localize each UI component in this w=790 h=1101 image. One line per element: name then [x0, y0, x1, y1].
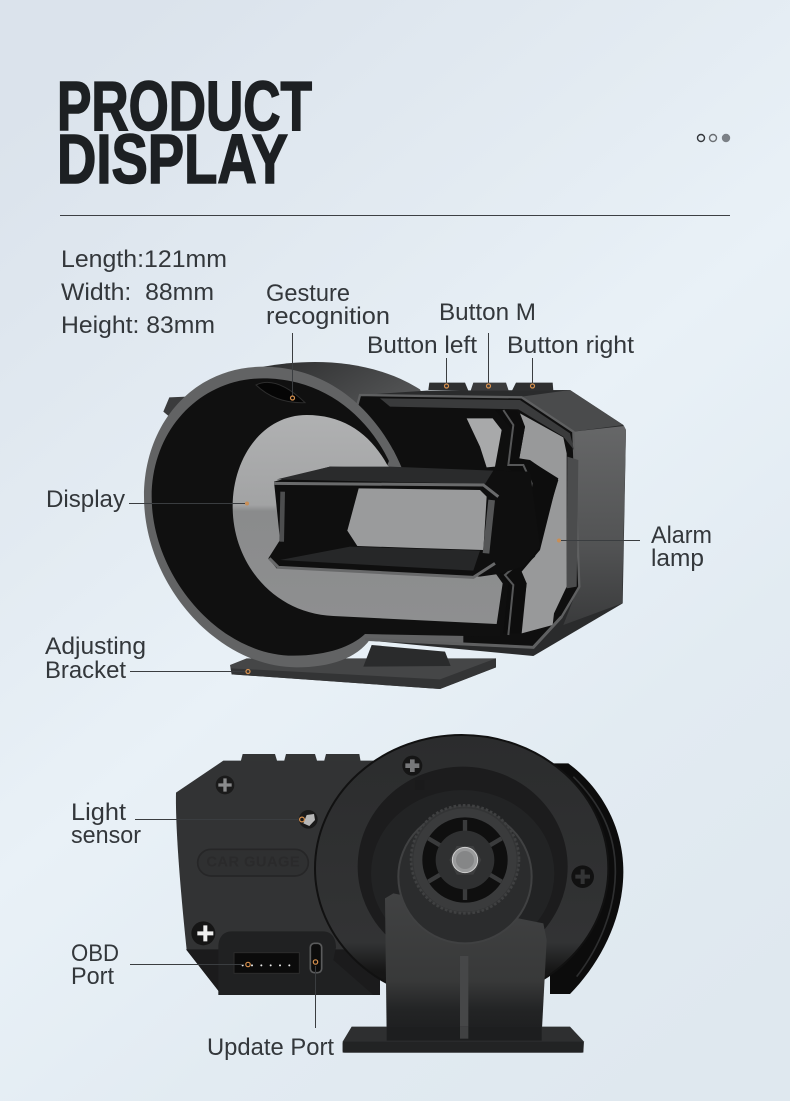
connector — [234, 953, 299, 973]
housing lower band — [186, 949, 380, 995]
callout: button left — [367, 332, 477, 388]
window top edge — [274, 483, 498, 497]
callout: light sensor — [71, 799, 304, 849]
redraw right frame edge — [365, 617, 562, 647]
window right edge — [486, 500, 492, 553]
dimensions text: Height: 83mm — [61, 312, 215, 339]
callout: button M: Button M — [439, 299, 536, 326]
window bottom edge — [269, 558, 495, 577]
recess ring — [371, 790, 554, 957]
callout: light sensor: Light — [71, 799, 126, 826]
callout: display — [46, 486, 249, 513]
dimensions text: Length:121mm — [61, 246, 227, 273]
micro usb — [310, 943, 322, 973]
device body — [343, 390, 626, 656]
base plate — [343, 1027, 584, 1053]
rib foot — [460, 1027, 468, 1039]
callout: OBD port — [71, 940, 250, 990]
knob vent — [422, 817, 508, 903]
buttons — [428, 383, 468, 391]
rear rim highlight — [573, 777, 615, 977]
mount plate edge — [231, 658, 496, 689]
callout: OBD port: Port — [71, 963, 114, 990]
callout: button left: Button left — [367, 332, 477, 359]
housing — [176, 761, 380, 995]
rear back rim — [550, 763, 623, 994]
knob outer — [413, 808, 517, 912]
rear cylinder — [263, 362, 463, 483]
callout: gesture recognition — [266, 280, 390, 400]
screw: top left — [216, 776, 234, 794]
knurled collar — [411, 805, 519, 913]
light sensor — [299, 810, 318, 829]
mount neck — [363, 645, 451, 667]
callout: button right: Button right — [507, 332, 634, 359]
upper grey window — [467, 418, 502, 467]
title: PRODUCT — [57, 67, 312, 145]
recess — [358, 767, 568, 967]
side stub — [163, 397, 187, 420]
top inner lip — [380, 398, 574, 450]
hex nut — [449, 846, 481, 875]
right inner lip — [567, 457, 578, 588]
title — [57, 67, 312, 198]
display grey surface — [233, 415, 503, 624]
ring edge over window top — [387, 450, 404, 473]
page indicator dots — [698, 134, 730, 142]
callout: adjusting bracket — [45, 633, 250, 684]
mount plate — [230, 658, 496, 689]
bracket foot — [387, 1027, 542, 1041]
dark S dividers — [495, 410, 558, 633]
front frame — [337, 395, 579, 647]
hub — [436, 831, 494, 889]
main disc — [315, 735, 608, 1002]
nut center — [452, 847, 478, 873]
callout: display: Display — [46, 486, 126, 513]
ring rim — [144, 367, 463, 667]
product: front view — [144, 362, 626, 689]
product: rear view — [176, 735, 623, 1053]
screw: lower left — [191, 921, 215, 945]
bracket rib — [460, 956, 468, 1039]
top buttons — [241, 754, 361, 762]
callout: adjusting bracket: Adjusting — [45, 633, 146, 660]
callout: light sensor: sensor — [71, 822, 141, 849]
divider highlight — [503, 410, 532, 635]
window top surface — [277, 467, 493, 484]
callout: update port: Update Port — [207, 1034, 334, 1061]
callout: update port — [207, 960, 334, 1061]
callout: OBD port: OBD — [71, 940, 119, 967]
vent spokes — [428, 820, 502, 900]
callout: adjusting bracket: Bracket — [45, 657, 126, 684]
callout: button M — [439, 299, 536, 388]
base plate front edge — [343, 1042, 583, 1053]
right grey display panel — [517, 413, 567, 633]
callout: gesture recognition: Gesture — [266, 280, 350, 307]
callout: button right — [507, 332, 634, 388]
screw: right disc — [571, 865, 594, 888]
callout: gesture recognition: recognition — [266, 303, 390, 330]
top marking — [415, 780, 424, 790]
callout: alarm lamp: lamp — [651, 545, 704, 572]
title: DISPLAY — [57, 120, 288, 198]
dimensions text — [61, 246, 227, 339]
port recess — [218, 931, 373, 995]
connector pins — [242, 964, 290, 966]
callout: alarm lamp — [557, 522, 712, 572]
gesture sensor slot — [256, 382, 305, 403]
ring inner black — [152, 378, 500, 656]
logo text: CAR GUAGE — [206, 855, 300, 871]
top face highlight — [522, 390, 623, 432]
window grey glass — [347, 488, 487, 550]
logo plate — [198, 849, 308, 876]
window left edge — [275, 492, 290, 542]
screw: top disc — [402, 756, 422, 776]
knob collar — [398, 810, 532, 943]
window top dark surface — [268, 467, 540, 577]
bracket arch — [385, 893, 547, 1035]
dimensions text: Width: 88mm — [61, 279, 214, 306]
callout: alarm lamp: Alarm — [651, 522, 712, 549]
right side face — [563, 426, 626, 625]
window floor — [280, 547, 480, 571]
